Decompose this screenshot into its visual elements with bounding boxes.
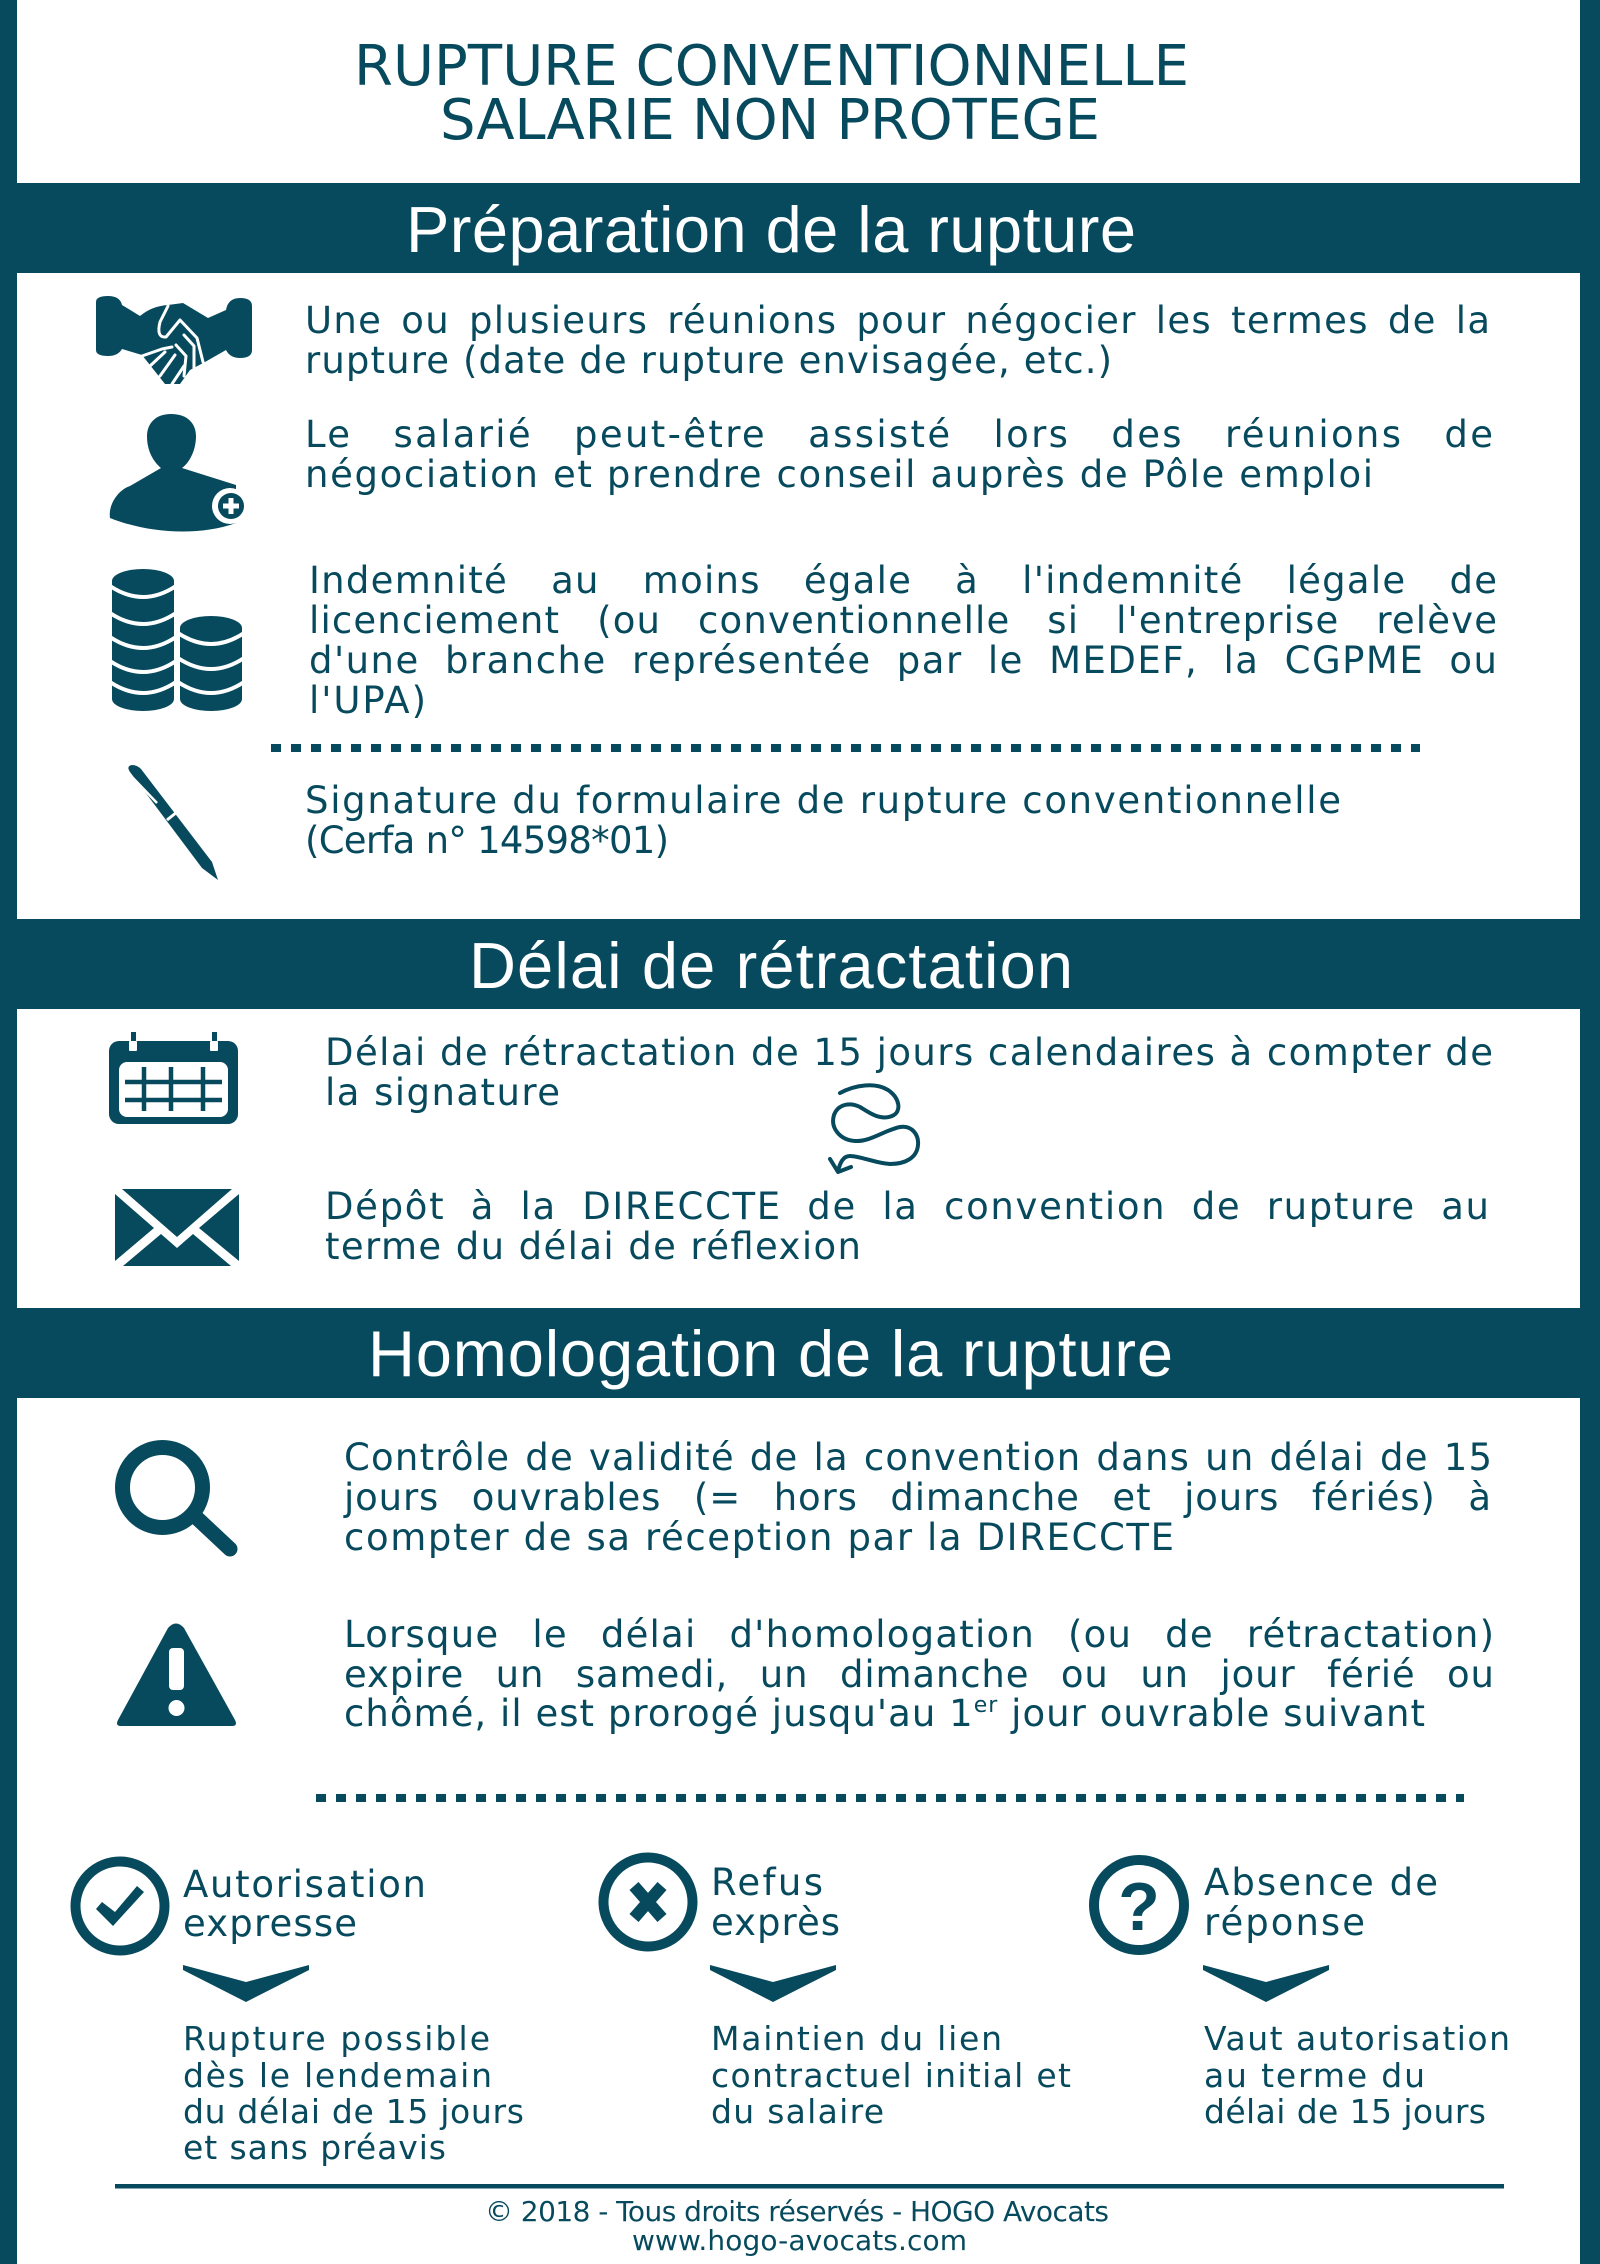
text: indemnité: Indemnité au moins égale à l'indemnité légale de [309,559,1497,602]
text: dépôt: Dépôt à la DIRECCTE de la convention de rupture au [325,1185,1489,1228]
arrow: chevron [183,1965,309,2002]
text: délai prorogé: jour ouvrable suivant [998,1692,1425,1735]
text: dépôt: terme du délai de réflexion [325,1225,861,1268]
footer: © 2018 - Tous droits réservés - HOGO Avocats [485,2195,1109,2228]
text: salarié assisté: négociation et prendre conseil auprès de Pôle emploi [305,453,1373,496]
icon: cross circle [604,1858,692,1946]
text: réunions: Une ou plusieurs réunions pour négocier les termes de la [305,299,1490,342]
text: salarié assisté: Le salarié peut-être assisté lors des réunions de [305,413,1493,456]
text: rupture possible: Rupture possible [183,2019,490,2058]
arrow: chevron [1203,1965,1329,2002]
heading: homologation [0,1308,1600,1398]
text: vaut autorisation: Vaut autorisation [1204,2019,1510,2058]
icon: calendar [109,1032,238,1124]
text: vaut autorisation: au terme du [1204,2056,1425,2095]
icon: magnifier [122,1448,230,1549]
text: refus exprès [711,1861,840,1944]
title: SALARIE NON PROTEGE [440,88,1100,153]
icon: question circle [1094,1860,1184,1950]
text: contrôle [343,1436,1492,1559]
text: réunions [305,299,1490,382]
footer: www.hogo-avocats.com [632,2224,967,2257]
text: maintien: contractuel initial et [711,2056,1071,2095]
column: absence de réponse [1094,1860,1510,2131]
text: vaut autorisation [1204,2019,1510,2131]
text: indemnité: licenciement (ou conventionnelle si l'entreprise relève [309,599,1497,642]
text: autorisation expresse [183,1863,426,1945]
text: salarié assisté [305,413,1493,496]
icon: question circle: ? [1118,1869,1160,1945]
heading: préparation: Préparation de la rupture [406,193,1136,266]
text: réunions: rupture (date de rupture envisagée, etc.) [305,339,1112,382]
text: refus exprès: exprès [711,1901,840,1944]
text: autorisation expresse: Autorisation [183,1863,426,1906]
text: indemnité: l'UPA) [309,679,426,722]
text: délai prorogé: chômé, il est prorogé jusqu'au 1 [344,1692,973,1735]
text: absence de réponse: Absence de [1204,1861,1438,1904]
text: indemnité [309,559,1497,722]
separator [271,744,1420,752]
text: contrôle: jours ouvrables (= hors dimanche et jours fériés) à [343,1476,1491,1519]
text: maintien: du salaire [711,2092,884,2131]
text: délai prorogé: expire un samedi, un dimanche ou un jour férié ou [344,1653,1494,1696]
text: absence de réponse: réponse [1204,1901,1365,1944]
icon: warning triangle [117,1624,236,1726]
icon: pen [128,765,218,880]
text: autorisation expresse: expresse [183,1902,357,1945]
column: autorisation expresse [76,1862,524,2167]
text: contrôle: Contrôle de validité de la convention dans un délai de 15 [344,1436,1492,1479]
icon: envelope [115,1189,239,1266]
icon: coin stacks [110,569,244,711]
text: délai 15 jours: la signature [325,1071,560,1114]
text: vaut autorisation: délai de 15 jours [1204,2092,1486,2131]
text: contrôle: compter de sa réception par la DIRECCTE [344,1516,1174,1559]
heading: préparation [0,183,1600,273]
separator [316,1794,1464,1802]
text: rupture possible: et sans préavis [183,2128,446,2167]
panel: homologation de la rupture [0,1308,1600,2167]
text: signature: Signature du formulaire de rupture conventionnelle [305,779,1341,822]
text: maintien [711,2019,1071,2131]
text: maintien: Maintien du lien [711,2019,1002,2058]
text: rupture possible: du délai de 15 jours [183,2092,524,2131]
arrow: chevron [710,1965,836,2002]
text: signature: (Cerfa n° 14598*01) [305,819,669,862]
panel: délai de rétractation [0,919,1600,1268]
text: indemnité: d'une branche représentée par le MEDEF, la CGPME ou [309,639,1497,682]
title [354,34,1189,153]
text: absence de réponse [1204,1861,1438,1944]
heading: homologation: Homologation de la rupture [368,1317,1173,1390]
text: délai prorogé: Lorsque le délai d'homologation (ou de rétractation) [344,1613,1494,1656]
text: rupture possible: dès le lendemain [183,2056,492,2095]
icon: check circle [76,1862,164,1950]
text: rupture possible [183,2019,524,2167]
text: délai prorogé [344,1613,1494,1735]
title: RUPTURE CONVENTIONNELLE [354,34,1189,99]
text: refus exprès: Refus [711,1861,823,1904]
icon: person with plus [110,414,248,532]
heading: délai: Délai de rétractation [469,929,1073,1002]
icon: handshake [96,296,252,384]
text: délai 15 jours [325,1031,1493,1114]
column: refus exprès [604,1858,1071,2131]
text: signature [305,779,1341,862]
panel: préparation de la rupture [0,183,1600,880]
text: délai 15 jours: Délai de rétractation de 15 jours calendaires à compter de [325,1031,1493,1074]
heading: délai [0,919,1600,1009]
text: dépôt [325,1185,1489,1268]
text: délai prorogé: er [974,1693,998,1718]
arrow: squiggle [830,1085,918,1172]
footer [115,2184,1504,2257]
